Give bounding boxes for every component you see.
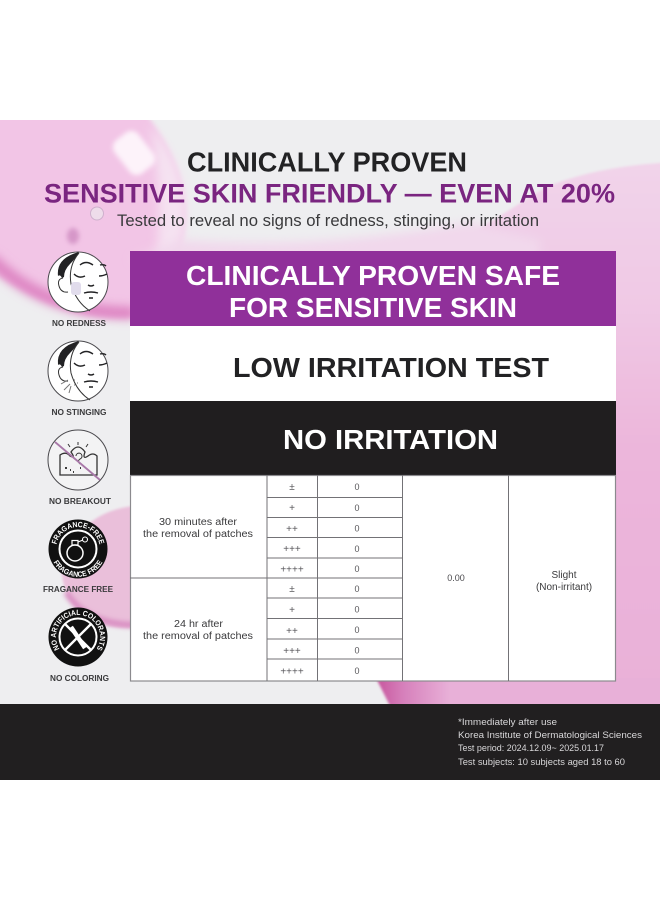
footnote text bbox=[458, 717, 642, 768]
panel: footer notes bbox=[0, 704, 660, 780]
counts: 0 bbox=[354, 482, 360, 492]
footnote text: Test period: 2024.12.09~ 2025.01.17 bbox=[458, 743, 604, 754]
icon: no coloring: NO ARTIFICIAL COLORANTS bbox=[50, 610, 106, 651]
irritation result: Slight bbox=[551, 570, 577, 581]
counts: 0 bbox=[354, 544, 360, 554]
banner heading line 1: CLINICALLY PROVEN SAFE bbox=[186, 260, 560, 291]
grade symbols: ± bbox=[289, 482, 295, 493]
grade symbols bbox=[280, 482, 304, 678]
grade symbols: ++ bbox=[286, 524, 298, 535]
icon: fragrance free: FRAGANCE FREE bbox=[54, 560, 102, 577]
counts: 0 bbox=[354, 604, 360, 614]
grade symbols: ++++ bbox=[280, 666, 304, 678]
grade symbols: +++ bbox=[283, 544, 301, 555]
irritation result: (Non-irritant) bbox=[536, 582, 592, 593]
footnote text: Test subjects: 10 subjects aged 18 to 60 bbox=[458, 757, 625, 768]
icon: no stinging bbox=[48, 341, 108, 401]
low irritation heading: LOW IRRITATION TEST bbox=[233, 352, 549, 383]
counts: 0 bbox=[354, 584, 360, 594]
counts: 0 bbox=[354, 524, 360, 534]
icon: no breakout bbox=[48, 430, 108, 490]
label: no coloring: NO COLORING bbox=[50, 674, 109, 683]
subtitle: Tested to reveal no signs of redness, stinging, or irritation bbox=[117, 212, 539, 230]
grade symbols: + bbox=[289, 503, 295, 514]
counts: 0 bbox=[354, 564, 360, 574]
panel: low irritation test bbox=[130, 326, 616, 401]
blurred pink background photo bbox=[0, 100, 660, 730]
panel: no irritation bbox=[130, 401, 616, 476]
results table bbox=[130, 475, 616, 681]
grade symbols: + bbox=[289, 605, 295, 616]
label: no redness: NO REDNESS bbox=[52, 319, 107, 328]
row label: 24 hr: 24 hr after bbox=[174, 619, 224, 630]
infographic canvas bbox=[0, 120, 660, 780]
label: fragrance free: FRAGANCE FREE bbox=[43, 585, 114, 594]
footnote text: Korea Institute of Dermatological Sciences bbox=[458, 730, 642, 741]
grade symbols: +++ bbox=[283, 646, 301, 657]
row label: 30 minutes: 30 minutes after bbox=[159, 517, 238, 528]
counts: 0 bbox=[354, 625, 360, 635]
icon: fragrance free: FRAGANCE-FREE bbox=[52, 522, 104, 544]
mean score: 0.00 bbox=[447, 573, 465, 583]
counts: 0 bbox=[354, 666, 360, 676]
label: no breakout: NO BREAKOUT bbox=[49, 497, 111, 506]
banner heading line 2: FOR SENSITIVE SKIN bbox=[229, 292, 517, 323]
footnote text: *Immediately after use bbox=[458, 717, 557, 728]
grade symbols: ++ bbox=[286, 626, 298, 637]
row label: 30 minutes: the removal of patches bbox=[143, 529, 253, 540]
label: no stinging: NO STINGING bbox=[52, 408, 106, 417]
counts: 0 bbox=[354, 503, 360, 513]
icon: no redness bbox=[48, 252, 108, 312]
grade symbols: ± bbox=[289, 584, 295, 595]
no irritation heading: NO IRRITATION bbox=[283, 424, 498, 455]
counts: 0 bbox=[354, 646, 360, 656]
panel: purple banner bbox=[130, 251, 616, 326]
counts bbox=[354, 482, 360, 676]
title line 1: CLINICALLY PROVEN bbox=[187, 146, 467, 178]
row label: 24 hr: the removal of patches bbox=[143, 631, 253, 642]
icon column bbox=[43, 252, 114, 683]
grade symbols: ++++ bbox=[280, 564, 304, 576]
icon: fragrance free bbox=[48, 520, 108, 578]
title line 2: SENSITIVE SKIN FRIENDLY — EVEN AT 20% bbox=[44, 178, 615, 208]
